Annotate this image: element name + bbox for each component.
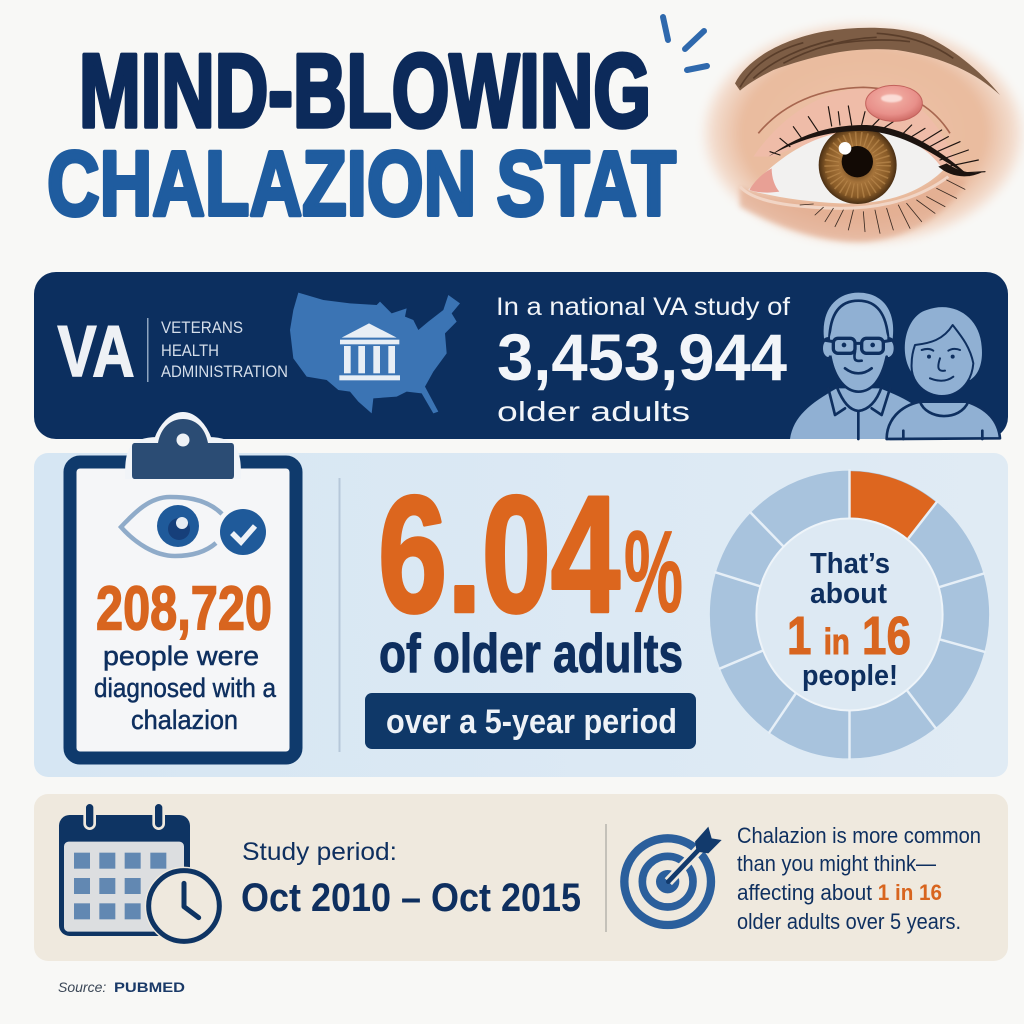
study size text: In a national VA study of [496,293,790,321]
period pill [365,693,696,749]
takeaway text [737,823,981,934]
diagnosis caption: chalazion [131,705,238,735]
source note [58,979,185,995]
study period text: Oct 2010 – Oct 2015 [241,876,581,920]
icon: calendar with clock [59,803,223,945]
icon: US map with government building [290,293,460,413]
study size text: 3,453,944 [497,320,787,394]
title line 2: CHALAZION STAT [47,133,676,235]
source note: PUBMED [114,979,185,995]
donut centre text: That’s [810,548,890,580]
panel: main statistics [34,415,1008,777]
study period text [241,838,581,920]
takeaway text: than you might think— [737,851,936,876]
diagnosis caption: diagnosed with a [94,673,277,703]
diagnosis caption: people were [103,641,259,671]
illustration: eye with chalazion [700,20,1024,247]
donut centre text: 1 in 16 [787,606,911,666]
veterans health administration label: HEALTH [161,341,219,360]
donut centre text [787,548,911,692]
takeaway text: older adults over 5 years. [737,909,961,934]
title line 1: MIND-BLOWING [79,34,651,150]
takeaway text: affecting about 1 in 16 [737,880,942,905]
clipboard card [70,415,296,758]
donut centre text: people! [802,660,898,692]
period pill: over a 5-year period [386,703,677,741]
study period text: Study period: [242,838,397,866]
donut centre text: about [810,578,887,610]
icon: eye with check mark [121,497,266,556]
icon: older couple [790,293,1000,439]
study size text [496,293,790,427]
donut chart: 1 in 16 [715,469,986,760]
diagnosis caption [94,641,277,735]
icon: emphasis sparks [663,17,707,70]
veterans health administration label: VETERANS [161,318,243,337]
headline percentage: 6.04 [378,462,620,648]
icon: target with arrow [624,827,722,925]
diagnosed count: 208,720 [96,574,272,644]
takeaway text: Chalazion is more common [737,823,981,848]
source note: Source: [58,979,106,995]
icon: clipboard clip [128,415,238,479]
veterans health administration label [161,318,288,381]
VA logo text: VA [58,312,134,392]
percentage caption: of older adults [379,622,683,684]
panel: VA study banner [34,272,1008,439]
panel: study period and takeaway [34,794,1008,961]
study size text: older adults [497,396,690,427]
veterans health administration label: ADMINISTRATION [161,362,288,381]
headline percentage: % [624,506,683,636]
title [47,34,676,235]
